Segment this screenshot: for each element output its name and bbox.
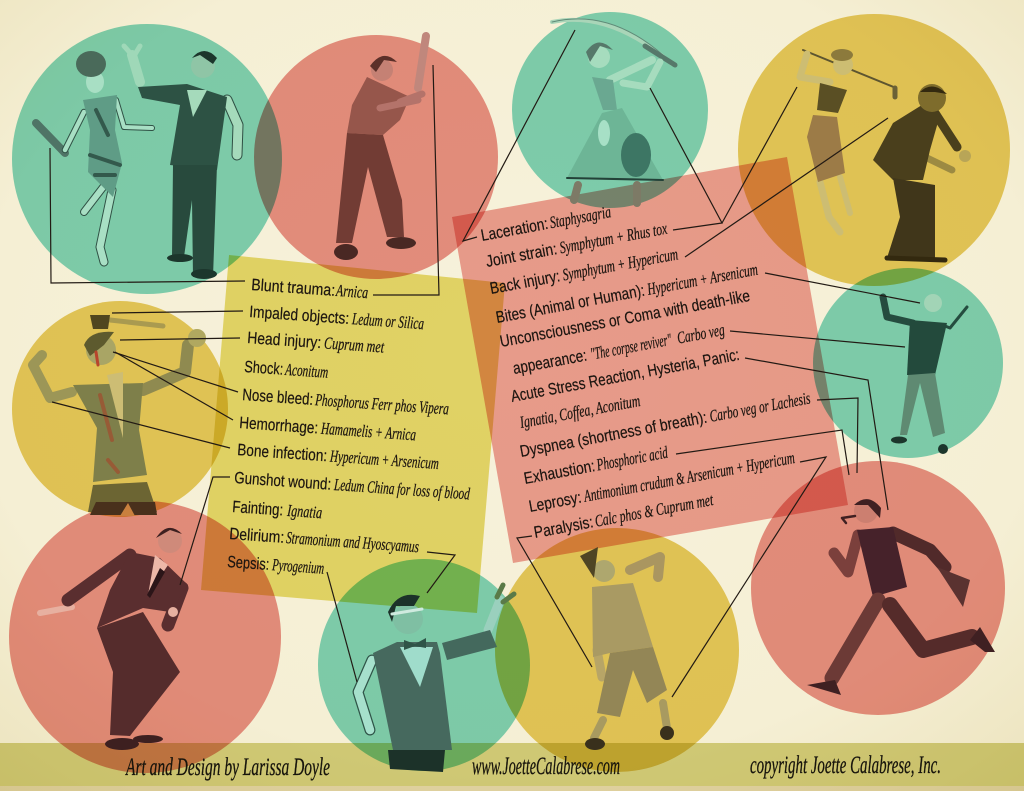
line: head injury: Cuprum met	[324, 333, 386, 357]
line: leprosy	[527, 448, 796, 516]
line: joint strain: Joint strain:	[484, 240, 559, 271]
leader lines	[50, 30, 920, 697]
line: hemorrhage: Hamamelis + Arnica	[320, 419, 417, 444]
line: leprosy: Leprosy:	[527, 489, 583, 516]
line: sepsis: Pyrogenium	[271, 555, 325, 578]
line: fainting	[232, 497, 323, 522]
line: exhaustion: Phosphoric acid	[594, 443, 670, 475]
line: delirium: Stramonium and Hyoscyamus	[286, 528, 420, 556]
line: bone infection: Hypericum + Arsenicum	[329, 446, 440, 473]
text block: red panel remedies	[479, 202, 812, 542]
footer credit: website: www.JoetteCalabrese.com	[472, 753, 620, 780]
circle: red top	[254, 35, 498, 279]
line: nose bleed	[242, 385, 450, 418]
figure: man in tuxedo	[124, 46, 238, 279]
line: gunshot wound: Gunshot wound:	[234, 469, 332, 494]
line: unconsciousness: Unconsciousness or Coma with death-like	[498, 287, 751, 351]
line: back injury	[488, 244, 680, 298]
line: back injury: Symphytum + Hypericum	[561, 244, 680, 284]
line: impaled objects: Impaled objects:	[249, 303, 350, 328]
figure: woman with golf club	[800, 49, 896, 232]
line: hemorrhage	[239, 413, 417, 444]
figure: man in suit holding bottle	[40, 528, 188, 750]
line: bites	[494, 260, 759, 327]
circle: teal top centre	[512, 12, 708, 208]
circle: yellow left	[12, 301, 228, 517]
line: sepsis	[227, 552, 325, 578]
circle: teal top left	[12, 24, 282, 294]
line: acute stress: Acute Stress Reaction, Hysteria, Panic:	[509, 346, 741, 406]
panel: red injuries	[452, 157, 848, 563]
line: paralysis	[532, 490, 716, 542]
figure: zombie in cardigan	[358, 585, 514, 772]
text block: yellow panel remedies	[227, 275, 471, 578]
line: appearance	[511, 320, 726, 378]
circle: yellow bottom	[495, 528, 739, 772]
line: shock	[244, 357, 329, 382]
line: delirium	[229, 524, 420, 556]
line: shock: Shock:	[244, 358, 284, 379]
line: fainting: Fainting:	[232, 498, 284, 520]
circle: red lower right	[751, 461, 1005, 715]
line: nose bleed: Phosphorus Ferr phos Vipera	[314, 390, 450, 418]
figure: zombie with axe in head	[33, 315, 206, 516]
figure: running man	[807, 499, 995, 695]
line: back injury: Back injury:	[488, 267, 562, 298]
line: blunt trauma: Blunt trauma:	[251, 276, 336, 300]
line: bone infection	[237, 440, 440, 473]
line: appearance: Carbo veg	[675, 320, 726, 347]
figure: woman with rolling pin	[36, 51, 152, 262]
line: joint strain	[484, 219, 669, 271]
figure: man in dark suit	[873, 84, 971, 260]
line: exhaustion	[522, 443, 670, 488]
line: leprosy: Antimonium crudum & Arsenicum + Hypericum	[582, 448, 796, 506]
line: impaled objects	[249, 302, 425, 333]
line: paralysis: Paralysis:	[532, 513, 595, 542]
line: paralysis: Calc phos & Cuprum met	[593, 490, 716, 531]
line: dyspnea	[518, 388, 812, 461]
footer band	[0, 743, 1024, 791]
line: laceration: Laceration:	[479, 215, 550, 245]
figure: scarecrow zombie	[580, 547, 674, 750]
figure: woman with sword	[552, 19, 675, 203]
footer credit: designer: Art and Design by Larissa Doyle	[125, 754, 330, 781]
line: bites: Bites (Animal or Human):	[494, 282, 646, 327]
circle: red lower left	[9, 501, 281, 773]
line: sepsis: Sepsis:	[227, 553, 270, 574]
line: appearance: appearance:	[511, 347, 588, 378]
line: ignatia: Ignatia, Coffea, Aconitum	[518, 391, 642, 432]
line: shock: Aconitum	[284, 360, 329, 382]
line: gunshot wound	[234, 468, 471, 503]
line: blunt trauma: Arnica	[335, 281, 369, 302]
figure: man with baseball bat	[334, 36, 426, 260]
line: laceration: Staphysagria	[548, 202, 613, 232]
circle: teal bottom	[318, 559, 530, 771]
line: nose bleed: Nose bleed:	[242, 386, 314, 409]
line: gunshot wound: Ledum China for loss of blood	[333, 475, 471, 503]
line: head injury: Head injury:	[247, 329, 322, 352]
line: delirium: Delirium:	[229, 525, 285, 547]
line: laceration	[479, 202, 613, 245]
line: bone infection: Bone infection:	[237, 441, 328, 465]
line: appearance: "The corpse reviver"	[589, 330, 674, 364]
line: dyspnea: Dyspnea (shortness of breath):	[518, 409, 709, 461]
line: dyspnea: Carbo veg or Lachesis	[708, 388, 812, 426]
line: exhaustion: Exhaustion:	[522, 457, 597, 488]
line: impaled objects: Ledum or Silica	[351, 309, 425, 333]
line: head injury	[247, 328, 386, 357]
line: fainting: Ignatia	[286, 501, 323, 522]
panel: yellow injuries	[201, 255, 505, 613]
line: hemorrhage: Hemorrhage:	[239, 414, 319, 438]
figure: zombie right	[883, 294, 967, 454]
circle: yellow top right	[738, 14, 1010, 286]
line: bites: Hypericum + Arsenicum	[645, 260, 759, 299]
circle: teal right	[813, 268, 1003, 458]
line: joint strain: Symphytum + Rhus tox	[558, 219, 669, 257]
